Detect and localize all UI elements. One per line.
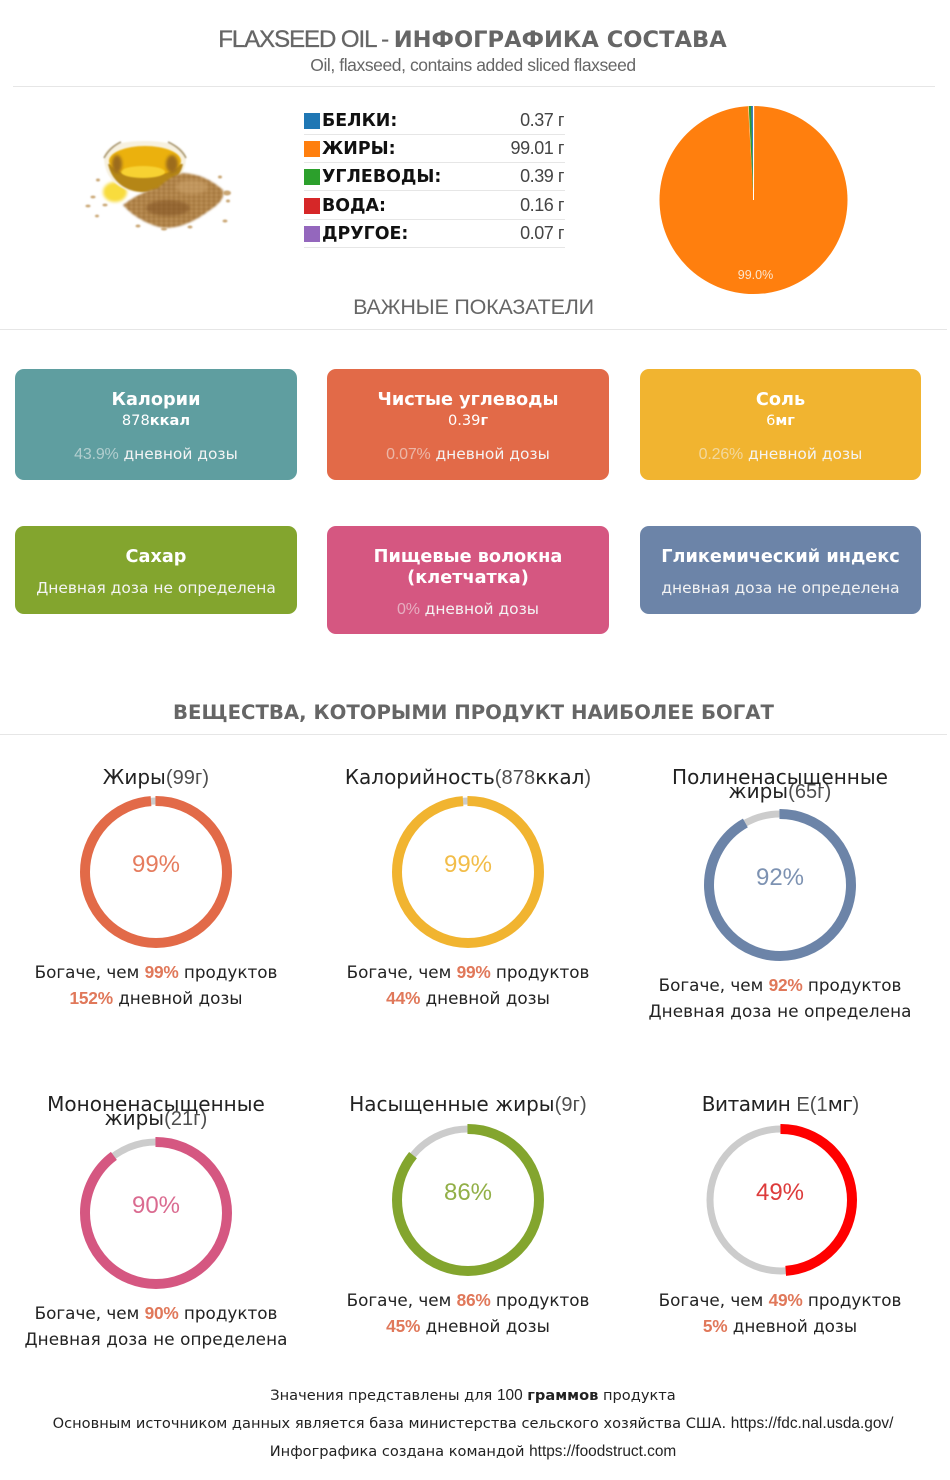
card: calories: 878ккал [122, 412, 190, 429]
card: salt: Соль [756, 390, 805, 410]
nutrient: calories: Калорийность(878ккал) [345, 765, 591, 789]
ring: 92% [704, 809, 856, 961]
nutrient: polyunsaturated fats [648, 765, 912, 1021]
row: protein: 0.37 г [520, 110, 564, 130]
nutrient: polyunsaturated fats: Полиненасыщенные [672, 765, 888, 789]
nutrient: monounsaturated fats: жиры(21г) [105, 1106, 207, 1130]
nutrient: monounsaturated fats: Мононенасыщенные [47, 1092, 265, 1116]
card: sugar: Сахар [126, 547, 186, 567]
card: calories: Калории [112, 390, 200, 410]
card: salt: 6мг [766, 412, 795, 429]
nutrient: calories: Богаче, чем 99% продуктов [347, 962, 589, 982]
nutrient: saturated fats: Насыщенные жиры(9г) [349, 1092, 587, 1116]
ring: 99% [80, 796, 232, 948]
nutrient: monounsaturated fats: Дневная доза не определена [24, 1329, 288, 1349]
icon: bowl of flaxseed oil with seeds [84, 140, 232, 232]
footer note: values per 100 grams: Значения представлены для 100 граммов продукта [270, 1387, 676, 1404]
nutrient: polyunsaturated fats: жиры(65г) [729, 779, 831, 803]
nutrient: vitamin E: Богаче, чем 49% продуктов [659, 1290, 901, 1310]
nutrient: calories [345, 765, 591, 1008]
pie chart: 99.0% [738, 268, 773, 282]
ring: 86%: 86% [444, 1179, 492, 1206]
card: glycemic index [640, 526, 921, 614]
pie chart [660, 106, 848, 294]
nutrient: monounsaturated fats: Богаче, чем 90% продуктов [35, 1303, 277, 1323]
card: salt: 0.26% дневной дозы [699, 445, 862, 463]
row: protein: БЕЛКИ: [322, 111, 397, 131]
row: fat: 99.01 г [511, 138, 564, 158]
nutrient: vitamin E [659, 1092, 901, 1336]
nutrient: polyunsaturated fats: Дневная доза не определена [648, 1001, 912, 1021]
nutrient: fat: Жиры(99г) [103, 765, 209, 789]
nutrient: vitamin E: 5% дневной дозы [703, 1316, 857, 1336]
row: other: ДРУГОЕ: [322, 224, 408, 244]
card: dietary fiber: 0% дневной дозы [397, 600, 539, 618]
footer note: data source: Основным источником данных является база министерства сельского хозяйства США. https://fdc.nal.usda.gov/ [53, 1415, 893, 1432]
ring: 90% [80, 1137, 232, 1289]
ring: 99%: 99% [132, 851, 180, 878]
card: glycemic index: Гликемический индекс [661, 547, 900, 567]
row: water: 0.16 г [520, 195, 564, 215]
card: net carbs: 0.39г [448, 412, 488, 429]
title: FLAXSEED OIL - ИНФОГРАФИКА СОСТАВА [218, 26, 727, 53]
nutrient: polyunsaturated fats: Богаче, чем 92% продуктов [659, 975, 901, 995]
card: net carbs: Чистые углеводы [378, 390, 558, 410]
card: sugar [15, 526, 297, 614]
nutrient: saturated fats [347, 1092, 589, 1336]
row: carbohydrates: 0.39 г [520, 166, 564, 186]
nutrient: fat: Богаче, чем 99% продуктов [35, 962, 277, 982]
row: other [304, 220, 565, 248]
row: fat: ЖИРЫ: [322, 139, 396, 159]
ring: 90%: 90% [132, 1192, 180, 1219]
card: dietary fiber: (клетчатка) [407, 568, 529, 588]
ring: 99%: 99% [444, 851, 492, 878]
nutrient: calories: 44% дневной дозы [386, 988, 550, 1008]
card: net carbs [327, 369, 609, 480]
card: sugar: Дневная доза не определена [36, 579, 276, 597]
ring: 49% [706, 1124, 857, 1276]
card: glycemic index: дневная доза не определена [661, 579, 900, 597]
row: water: ВОДА: [322, 196, 386, 216]
nutrient: saturated fats: 45% дневной дозы [386, 1316, 550, 1336]
heading: richest nutrients: ВЕЩЕСТВА, КОТОРЫМИ ПРОДУКТ НАИБОЛЕЕ БОГАТ [173, 701, 774, 724]
row: protein [304, 106, 565, 135]
ring: 99% [392, 796, 544, 948]
row: other: 0.07 г [520, 223, 564, 243]
nutrient: monounsaturated fats [24, 1092, 288, 1349]
row: carbohydrates: УГЛЕВОДЫ: [322, 167, 441, 187]
card: dietary fiber: Пищевые волокна [374, 547, 562, 567]
nutrient: vitamin E: Витамин E(1мг) [702, 1092, 859, 1116]
nutrient: saturated fats: Богаче, чем 86% продуктов [347, 1290, 589, 1310]
card: calories: 43.9% дневной дозы [74, 445, 238, 463]
footer note: credits: Инфографика создана командой https://foodstruct.com [270, 1443, 676, 1460]
panel: macronutrient table [304, 110, 565, 248]
card: dietary fiber [327, 526, 609, 634]
nutrient: fat [35, 765, 277, 1008]
heading: key indicators: ВАЖНЫЕ ПОКАЗАТЕЛИ [353, 295, 594, 319]
ring: 86% [392, 1124, 544, 1276]
card: salt [640, 369, 921, 480]
card: net carbs: 0.07% дневной дозы [386, 445, 550, 463]
row: carbohydrates [304, 163, 565, 191]
ring: 92%: 92% [756, 864, 804, 891]
row: fat [304, 135, 565, 163]
subtitle: Oil, flaxseed, contains added sliced flaxseed [310, 55, 636, 75]
card: calories [15, 369, 297, 480]
nutrient: fat: 152% дневной дозы [69, 988, 243, 1008]
ring: 49%: 49% [756, 1179, 804, 1206]
row: water [304, 191, 565, 220]
